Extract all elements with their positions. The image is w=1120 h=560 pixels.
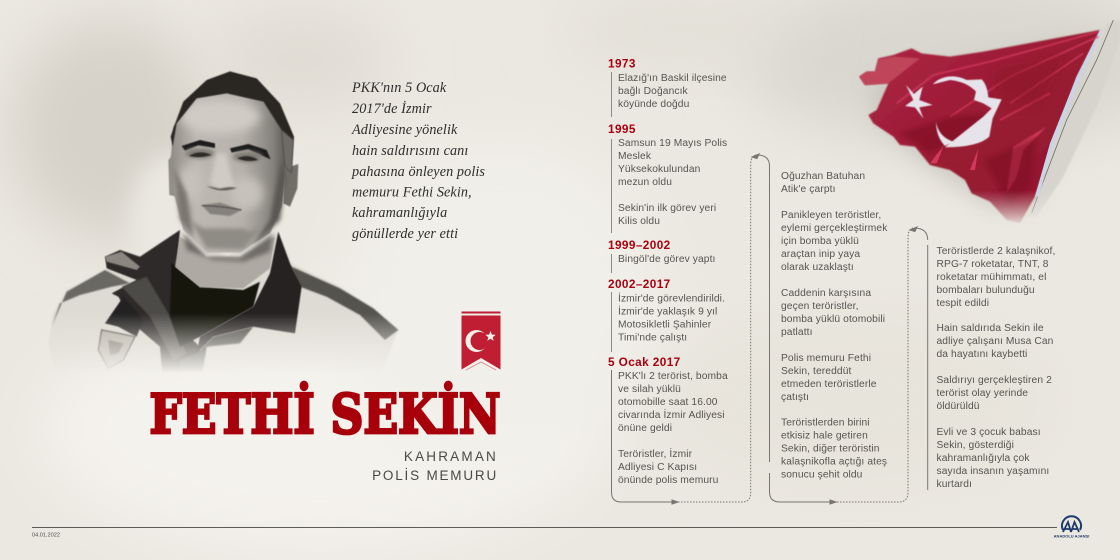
timeline column 3: terörist olay yerinde: [936, 388, 1028, 399]
flag soft shadow: [870, 40, 1083, 210]
1995 entry: Meslek: [618, 151, 652, 162]
1995 entry: mezun oldu: [618, 177, 672, 188]
intro italic text: hain saldırısını canı: [352, 143, 468, 159]
1999-2002 entry: 1999–2002: [608, 238, 671, 252]
arrow: connector from column 2 to column 3: [770, 166, 928, 504]
timeline column 3: Teröristlerde 2 kalaşnikof,: [936, 246, 1055, 257]
police badge: [98, 330, 135, 368]
timeline column 3: kahramanlığıyla çok: [936, 453, 1030, 464]
2002-2017 entry: Timi'nde çalıştı: [618, 332, 687, 344]
timeline column 3: öldürüldü: [936, 401, 980, 412]
right shoulder shade: [292, 267, 398, 340]
dark jacket front right: [197, 232, 302, 353]
intro italic text: kahramanlığıyla: [352, 205, 447, 221]
5 Ocak 2017 entry: önünde polis memuru: [618, 475, 719, 486]
1995 entry: Kilis oldu: [618, 216, 660, 227]
face: [171, 91, 287, 253]
eyes: [189, 152, 212, 157]
dark jacket front left: [105, 230, 200, 387]
intro italic text: gönüllerde yer etti: [352, 226, 458, 242]
timeline column 2: geçen teröristler,: [781, 301, 859, 312]
zipper and chest shadow: [193, 327, 254, 370]
logo: Anadolu Ajansi: [1054, 516, 1089, 538]
cheek shading: [173, 167, 193, 237]
1973 entry: bağlı Doğancık: [618, 86, 689, 97]
intro italic text: pahasına önleyen polis: [351, 164, 485, 180]
pocket flap: [105, 297, 143, 337]
timeline column 3: Evli ve 3 çocuk babası: [936, 427, 1041, 438]
1973 entry: köyünde doğdu: [618, 99, 690, 110]
5 Ocak 2017 entry: civarında İzmir Adliyesi: [618, 408, 725, 421]
timeline column 2: araçtan inip yaya: [781, 249, 860, 260]
1999-2002 entry: [608, 238, 716, 273]
timeline column 3: tespit edildi: [936, 298, 989, 309]
timeline column 3: [936, 246, 1055, 490]
1973 entry: 1973: [608, 56, 636, 70]
t-shirt: [170, 263, 260, 347]
timeline column 2: Atik'e çarptı: [781, 184, 836, 195]
timeline column 3: adliye çalışanı Musa Can: [936, 336, 1054, 347]
title: name: FETHİ SEKİN: [150, 381, 500, 446]
collar inner left lighter: [122, 277, 187, 360]
icon: martyr ribbon with crescent and star: [462, 312, 500, 370]
timeline column 3: RPG-7 roketatar, TNT, 8: [936, 259, 1049, 270]
intro italic text: [351, 80, 485, 242]
2002-2017 entry: İzmir'de görevlendirildi.: [618, 292, 725, 304]
ear: [283, 164, 298, 207]
subtitle: KAHRAMAN: [404, 449, 498, 464]
1995 entry: Yüksekokulundan: [618, 164, 701, 175]
jacket body: [50, 231, 397, 354]
timeline column 2: etkisiz hale getiren: [781, 430, 868, 442]
5 Ocak 2017 entry: otomobille saat 16.00: [618, 397, 718, 408]
beard shadow: [190, 220, 263, 249]
5 Ocak 2017 entry: 5 Ocak 2017: [608, 355, 681, 369]
timeline column 3: da hayatını kaybetti: [936, 349, 1027, 360]
timeline column 2: kalaşnikofla açtığı ateş: [781, 456, 887, 468]
2002-2017 entry: 2002–2017: [608, 277, 671, 291]
timeline column 3: bombaları bulunduğu: [936, 285, 1035, 296]
2002-2017 entry: İzmir'de yaklaşık 9 yıl: [618, 304, 717, 318]
subtitle: [372, 449, 498, 483]
1995 entry: Samsun 19 Mayıs Polis: [618, 138, 727, 149]
forehead highlight: [180, 100, 260, 133]
timeline column 2: çatıştı: [781, 392, 809, 403]
timeline column 3: sayıda insanın yaşamını: [936, 466, 1049, 477]
timeline column 2: eylemi gerçekleştirmek: [781, 223, 888, 234]
timeline column 2: Sekin, diğer teröristin: [781, 444, 880, 454]
2002-2017 entry: [608, 277, 725, 352]
hair: [171, 71, 294, 173]
portrait photo of Fethi Sekin: [48, 71, 398, 390]
1973 entry: [608, 56, 727, 117]
pale blue flag edge: [1035, 30, 1103, 197]
timeline column 2: Teröristlerden birini: [781, 418, 870, 428]
intro italic text: memuru Fethi Sekin,: [352, 184, 472, 200]
1995 entry: Sekin'in ilk görev yeri: [618, 203, 716, 214]
eye sockets: [185, 148, 215, 159]
flag pole structure: [1032, 110, 1094, 210]
crescent: [933, 76, 1002, 147]
neck: [175, 237, 275, 288]
timeline column 3: kurtardı: [936, 479, 972, 490]
timeline column 2: için bomba yüklü: [781, 236, 859, 247]
nose: [210, 153, 235, 191]
intro italic text: Adliyesine yönelik: [351, 122, 458, 138]
temple grey: [282, 130, 293, 173]
timeline column 2: Sekin, tereddüt: [781, 366, 851, 377]
timeline column 2: bomba yüklü otomobili: [781, 314, 885, 325]
1999-2002 entry: Bingöl'de görev yaptı: [618, 254, 716, 265]
left shoulder shade: [52, 270, 130, 327]
arrow: connector from column 1 to column 2: [612, 154, 770, 504]
timeline column 3: Sekin, gösterdiği: [936, 440, 1014, 451]
timeline column 2: Panikleyen teröristler,: [781, 210, 881, 221]
intro italic text: 2017'de İzmir: [352, 101, 432, 117]
5 Ocak 2017 entry: önüne geldi: [618, 423, 672, 434]
timeline column 2: sonucu şehit oldu: [781, 470, 863, 480]
timeline column 2: patlattı: [781, 327, 813, 338]
5 Ocak 2017 entry: Teröristler, İzmir: [618, 447, 693, 460]
shoulder strap: [105, 252, 140, 270]
5 Ocak 2017 entry: ve silah yüklü: [618, 384, 681, 395]
2002-2017 entry: Motosikletli Şahinler: [618, 320, 712, 330]
mouth: [202, 203, 242, 216]
timeline column 2: [781, 171, 888, 480]
cheek highlight: [230, 177, 263, 210]
timeline column 2: Polis memuru Fethi: [781, 353, 871, 364]
timeline column 3: Hain saldırıda Sekin ile: [936, 323, 1044, 334]
intro italic text: PKK'nın 5 Ocak: [351, 80, 447, 96]
timeline column 3: Saldırıyı gerçekleştiren 2: [936, 375, 1052, 386]
date: 04.01.2022: [32, 532, 60, 538]
1995 entry: 1995: [608, 122, 636, 136]
timeline column 3: roketatar mühimmatı, el: [936, 272, 1046, 283]
logo: Anadolu Ajansi: ANADOLU AJANSI: [1054, 534, 1089, 538]
eyebrows: [182, 140, 215, 151]
flag cloth: [859, 30, 1100, 223]
1973 entry: Elazığ'ın Baskil ilçesine: [618, 73, 727, 84]
star: [905, 85, 933, 118]
timeline column 2: etmeden teröristlerle: [781, 379, 877, 390]
footer line: [32, 526, 1057, 528]
timeline column 2: Oğuzhan Batuhan: [781, 171, 865, 182]
1995 entry: [608, 122, 727, 233]
5 Ocak 2017 entry: PKK'lı 2 terörist, bomba: [618, 371, 728, 382]
5 Ocak 2017 entry: [608, 355, 728, 486]
flag fold highlights: [897, 32, 1098, 120]
Turkish flag image: [859, 20, 1120, 223]
timeline column 2: olarak uzaklaştı: [781, 262, 854, 273]
5 Ocak 2017 entry: Adliyesi C Kapısı: [618, 462, 697, 473]
neck shadow: [183, 233, 273, 262]
timeline column 1: [608, 56, 728, 486]
subtitle: POLİS MEMURU: [372, 468, 498, 483]
timeline column 2: Caddenin karşısına: [781, 288, 871, 299]
flag fold shadows: [902, 114, 984, 152]
